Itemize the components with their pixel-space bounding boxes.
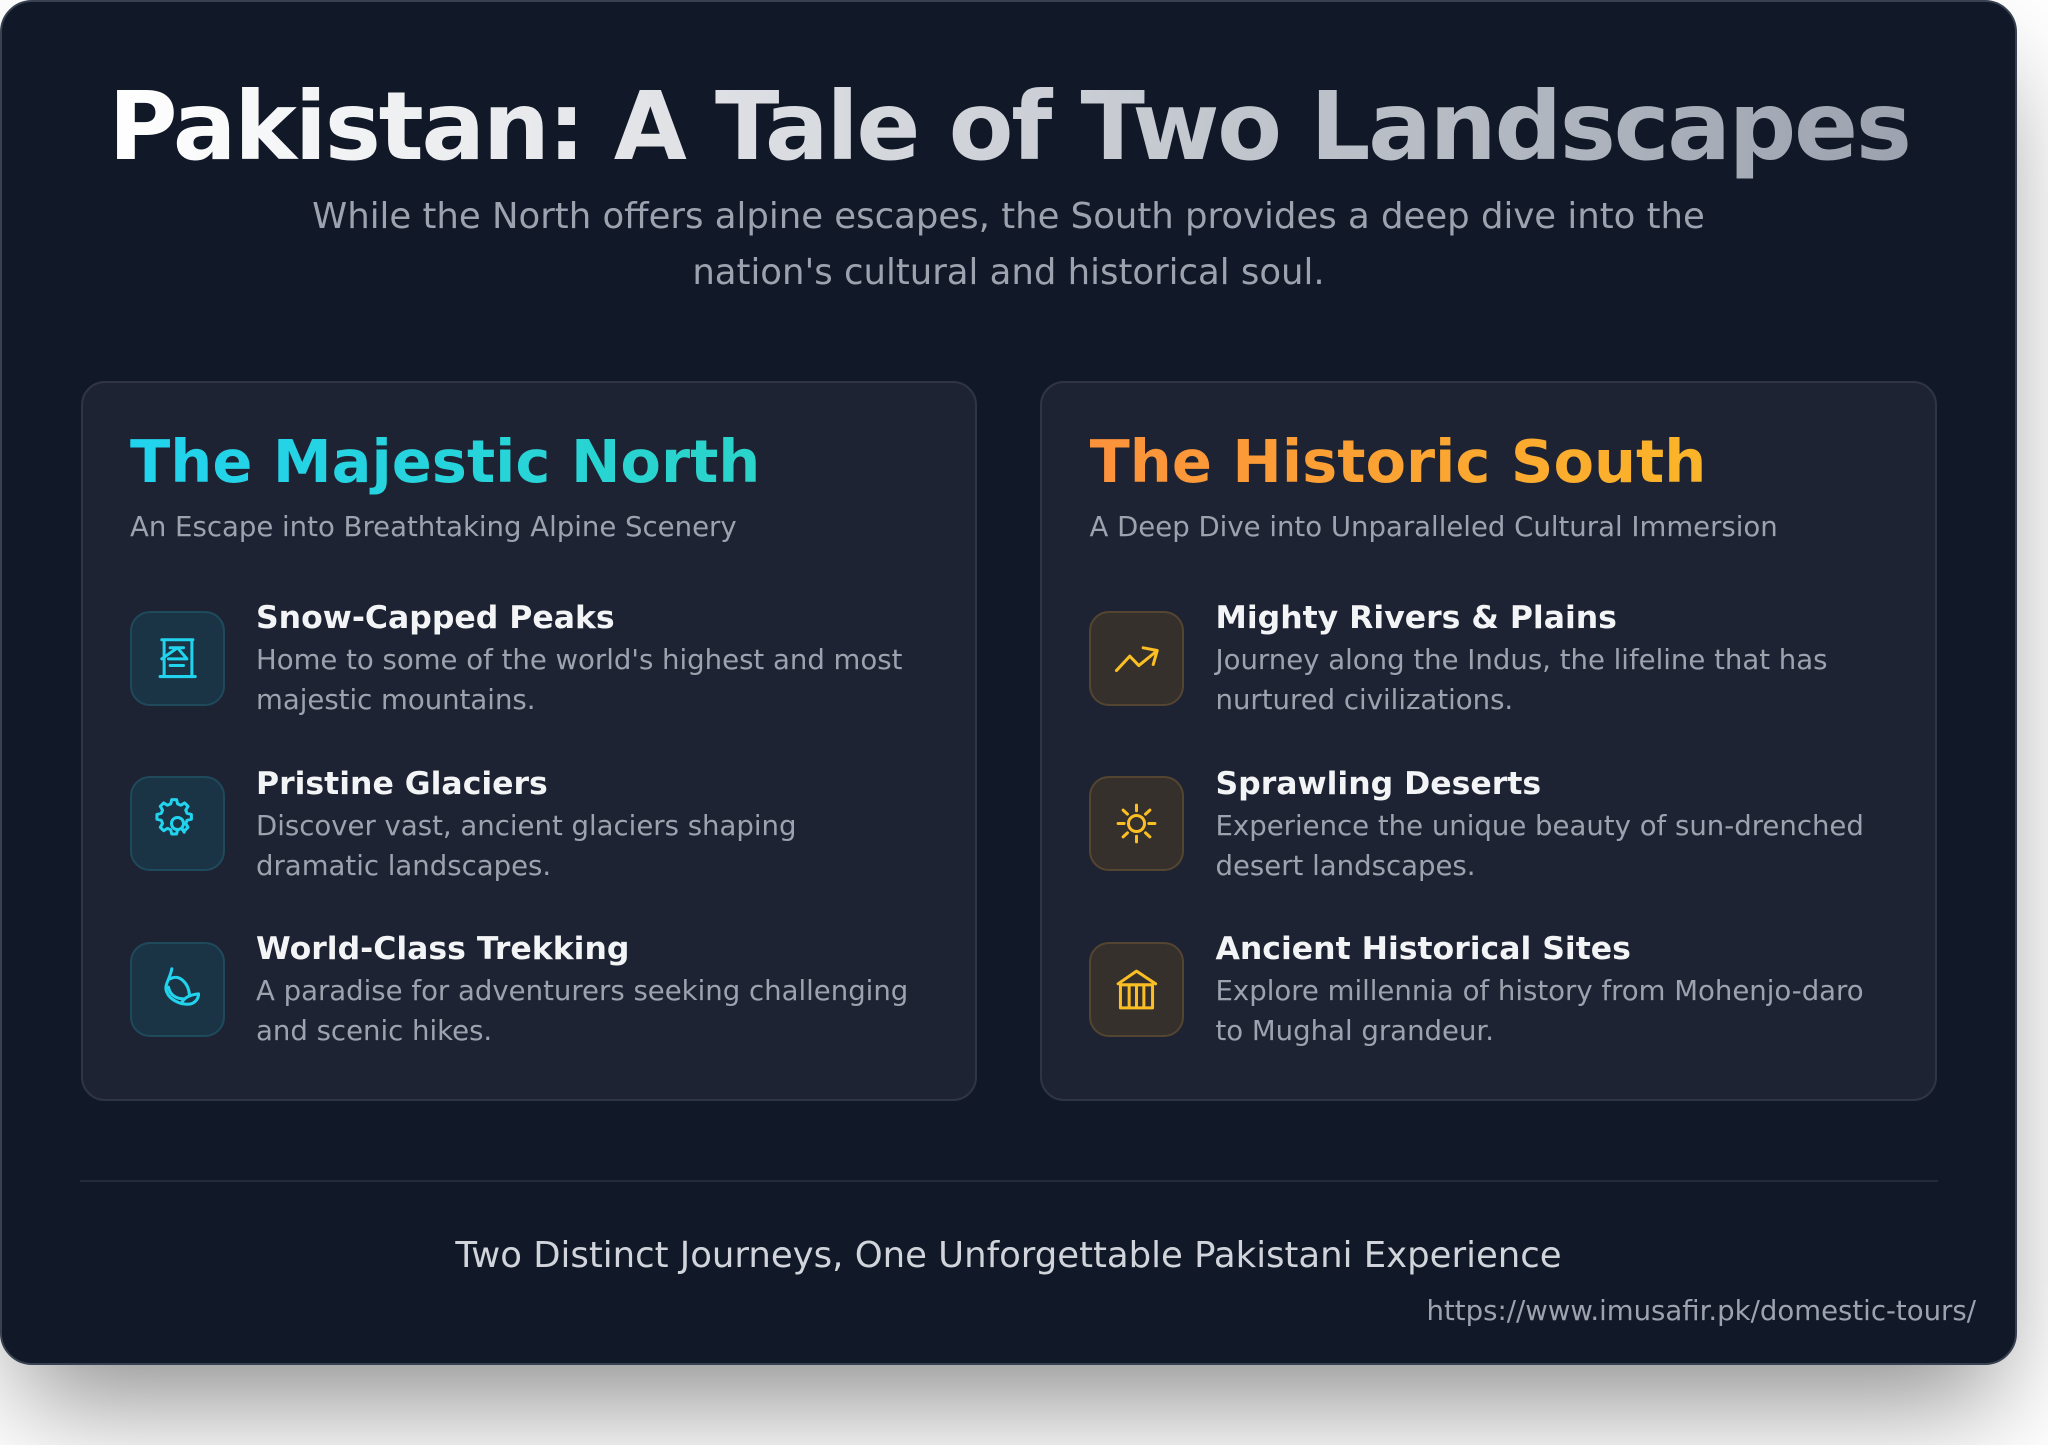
panel: south: [1040, 381, 1937, 1101]
icon: trekking: [130, 942, 225, 1037]
footer tagline: Two Distinct Journeys, One Unforgettable Pakistani Experience: [455, 1235, 1562, 1276]
subtitle: nation's cultural and historical soul.: [692, 252, 1325, 293]
source url: https://www.imusafir.pk/domestic-tours/: [1427, 1295, 1976, 1327]
item title: Sprawling Deserts: Sprawling Deserts: [1216, 766, 1541, 802]
item text: Mighty Rivers & Plains: [1214, 644, 1827, 716]
item text: Pristine Glaciers: [256, 810, 796, 882]
item text: Snow-Capped Peaks: [256, 644, 902, 716]
item text: Sprawling Deserts: Experience the unique beauty of sun-drenched: [1216, 810, 1864, 842]
item text: Pristine Glaciers: Discover vast, ancient glaciers shaping: [256, 810, 796, 842]
heading: north: The Majestic North: [130, 427, 760, 496]
icon: peaks: [130, 611, 225, 706]
icon: rivers trend arrow: [1089, 611, 1184, 706]
item text: Pristine Glaciers: dramatic landscapes.: [256, 850, 551, 882]
subtitle: [312, 196, 1705, 293]
item text: Ancient Historical Sites: Explore millennia of history from Mohenjo-daro: [1216, 975, 1864, 1007]
item text: Mighty Rivers & Plains: Journey along the Indus, the lifeline that has: [1216, 644, 1827, 676]
item title: Ancient Historical Sites: Ancient Historical Sites: [1216, 931, 1631, 967]
item text: Snow-Capped Peaks: majestic mountains.: [256, 684, 536, 716]
south tagline: A Deep Dive into Unparalleled Cultural Immersion: [1090, 511, 1778, 543]
item text: Sprawling Deserts: desert landscapes.: [1216, 850, 1476, 882]
item title: Pristine Glaciers: Pristine Glaciers: [256, 766, 548, 802]
item text: World-Class Trekking: A paradise for adventurers seeking challenging: [256, 975, 908, 1007]
item text: Ancient Historical Sites: [1216, 975, 1864, 1047]
icon: sun: [1089, 776, 1184, 871]
item text: Sprawling Deserts: [1216, 810, 1864, 882]
icon: historical building: [1089, 942, 1184, 1037]
item title: World-Class Trekking: World-Class Trekking: [256, 931, 629, 967]
subtitle: While the North offers alpine escapes, the South provides a deep dive into the: [312, 196, 1705, 237]
item text: World-Class Trekking: [256, 975, 908, 1047]
icon: glaciers: [130, 776, 225, 871]
heading: south: The Historic South: [1090, 427, 1706, 496]
item text: World-Class Trekking: and scenic hikes.: [256, 1015, 492, 1047]
title: Pakistan: A Tale of Two Landscapes: [108, 72, 1910, 182]
item title: Snow-Capped Peaks: Snow-Capped Peaks: [256, 600, 615, 636]
footer divider: [80, 1180, 1938, 1182]
item title: Mighty Rivers & Plains: Mighty Rivers & Plains: [1216, 600, 1617, 636]
item text: Snow-Capped Peaks: Home to some of the world's highest and most: [256, 644, 902, 676]
panel: north: [81, 381, 977, 1101]
item text: Ancient Historical Sites: to Mughal grandeur.: [1216, 1015, 1494, 1047]
north tagline: An Escape into Breathtaking Alpine Scenery: [130, 511, 737, 543]
item text: Mighty Rivers & Plains: nurtured civilizations.: [1216, 684, 1513, 716]
